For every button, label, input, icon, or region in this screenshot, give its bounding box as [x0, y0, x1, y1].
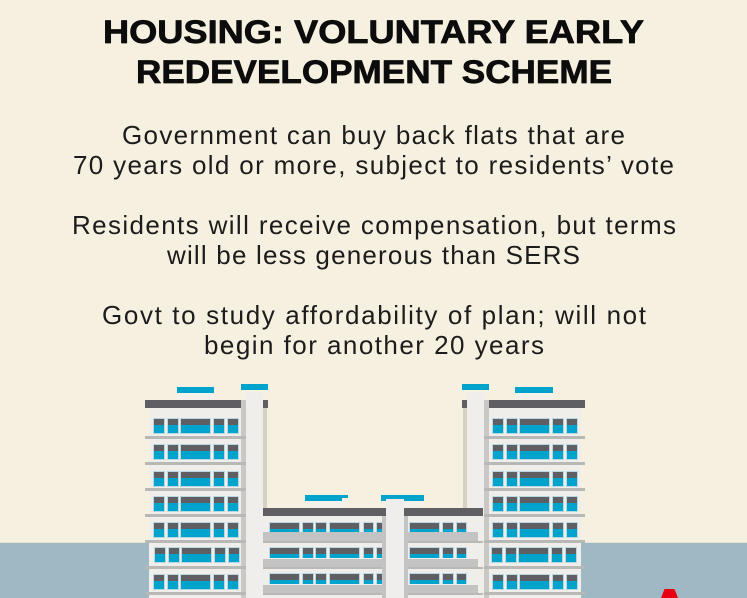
text block: buy back [73, 120, 674, 180]
title: REDEVELOPMENT SCHEME [136, 54, 612, 90]
text block: buy back: Government can buy back flats that are [122, 120, 625, 150]
text block: compensation [72, 210, 676, 270]
text block: affordability [102, 300, 647, 360]
water band [0, 542, 747, 598]
title [103, 14, 644, 90]
text block: affordability: begin for another 20 years [204, 330, 544, 360]
right tower [462, 384, 585, 598]
icon: red marker tip [661, 589, 678, 598]
title: HOUSING: VOLUNTARY EARLY [103, 14, 644, 50]
text block: compensation: will be less generous than SERS [166, 240, 580, 270]
text block: buy back: 70 years old or more, subject to residents’ vote [73, 150, 674, 180]
text block: compensation: Residents will receive compensation, but terms [72, 210, 676, 240]
text block: affordability: Govt to study affordability of plan; will not [102, 300, 647, 330]
middle block [263, 495, 484, 598]
left tower [145, 384, 268, 598]
illustration: HDB flats [145, 384, 585, 598]
